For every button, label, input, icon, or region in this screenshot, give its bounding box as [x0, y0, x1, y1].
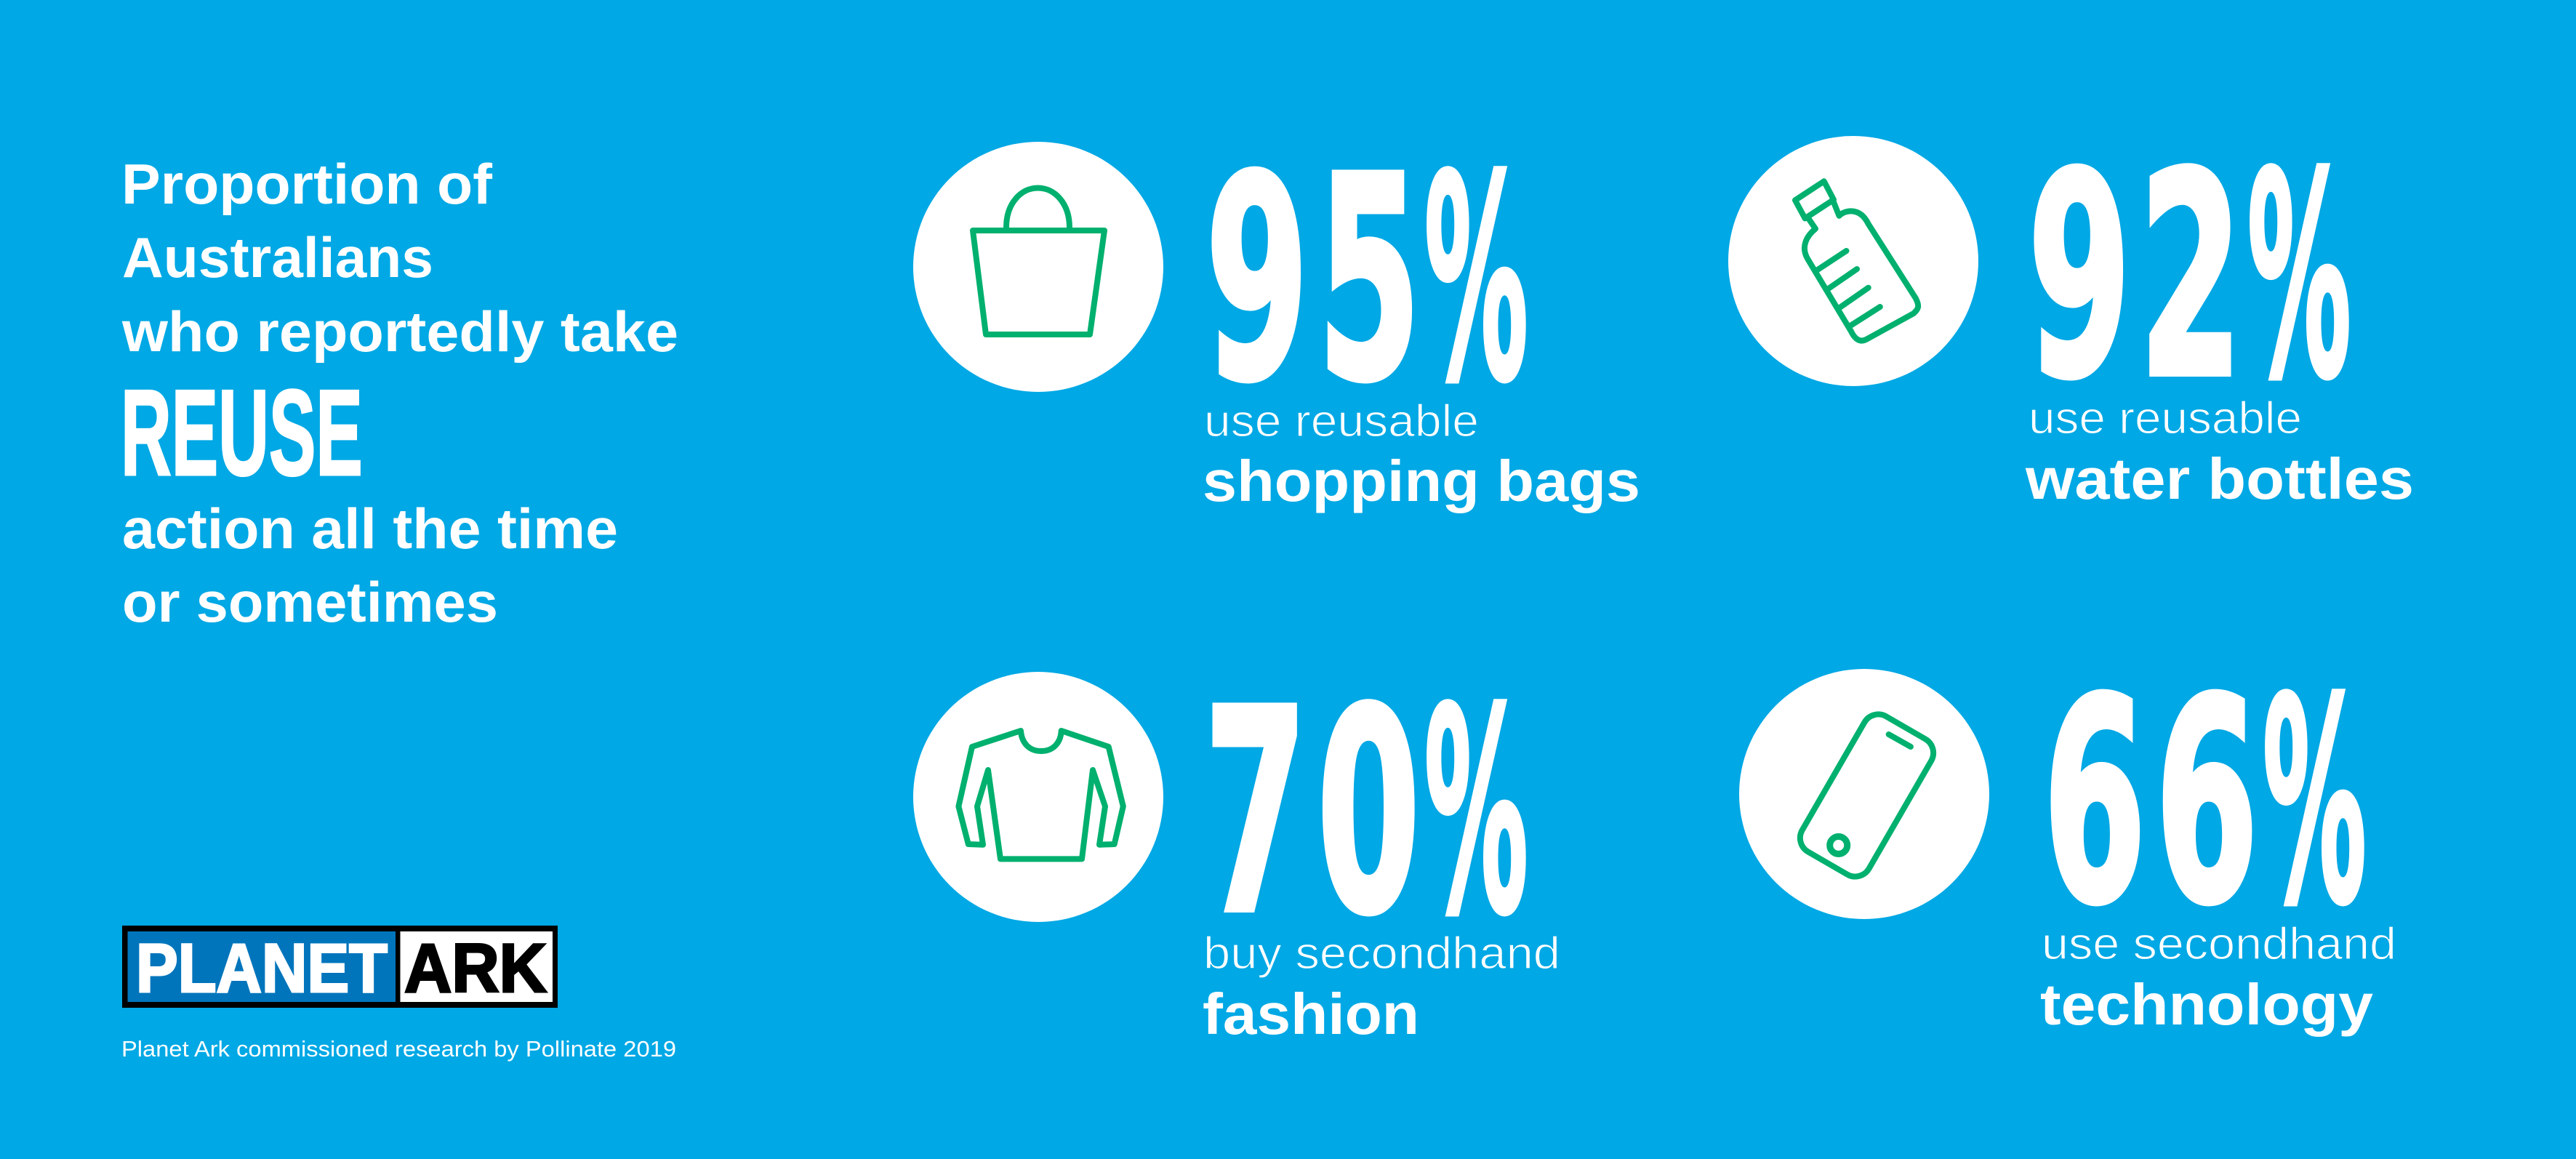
label: use secondhand technology: technology	[2040, 972, 2374, 1037]
title: proportion of Australians: Australians	[122, 225, 433, 289]
logo: Planet Ark: ARK	[404, 930, 547, 1007]
label: use reusable shopping bags	[1203, 396, 1640, 513]
stat: 66%	[2043, 640, 2367, 966]
label: use reusable water bottles: use reusable	[2029, 393, 2302, 444]
stat: 66%: %	[2263, 641, 2367, 966]
label: use reusable water bottles	[2025, 393, 2414, 511]
stat: 70%	[1204, 650, 1528, 976]
stat: 95%: 95	[1205, 117, 1421, 443]
label: use reusable water bottles: water bottles	[2025, 446, 2414, 511]
title: proportion of Australians: or sometimes	[122, 570, 498, 634]
label: buy secondhand fashion: fashion	[1203, 982, 1419, 1046]
title: proportion of Australians: action all the time	[122, 497, 618, 561]
stat: 92%: %	[2247, 116, 2351, 441]
label: use secondhand technology: use secondhand	[2042, 919, 2396, 969]
title: proportion of Australians	[121, 152, 678, 634]
logo: Planet Ark	[122, 926, 558, 1008]
icon: smartphone	[1739, 669, 1989, 919]
panel: water bottles	[1728, 114, 2414, 511]
label: buy secondhand fashion: buy secondhand	[1203, 929, 1560, 979]
title: proportion of Australians: who reportedly take	[121, 300, 678, 364]
label: use reusable shopping bags: use reusable	[1204, 396, 1479, 446]
icon: sweater	[913, 672, 1163, 922]
label: use secondhand technology	[2040, 919, 2396, 1037]
panel: technology	[1739, 640, 2396, 1037]
stat: 95%	[1205, 117, 1528, 444]
stat: 66%: 66	[2043, 640, 2258, 966]
title: proportion of Australians: Proportion of	[121, 152, 493, 216]
stat: 92%	[2028, 114, 2351, 441]
title: proportion of Australians: REUSE	[121, 365, 363, 502]
panel: fashion	[913, 650, 1560, 1046]
source caption: Planet Ark commissioned research by Pollinate 2019	[121, 1036, 676, 1062]
panel: shopping bags	[913, 117, 1640, 513]
icon: shopping bag	[913, 142, 1163, 392]
stat: 70%: %	[1424, 651, 1528, 976]
label: use reusable shopping bags: shopping bags	[1203, 449, 1640, 513]
logo: Planet Ark: PLANET	[136, 930, 388, 1007]
stat: 70%: 70	[1204, 650, 1420, 976]
stat: 92%: 92	[2028, 114, 2242, 440]
label: buy secondhand fashion	[1203, 929, 1560, 1046]
stat: 95%: %	[1424, 119, 1528, 444]
icon: water bottle	[1728, 136, 1978, 386]
